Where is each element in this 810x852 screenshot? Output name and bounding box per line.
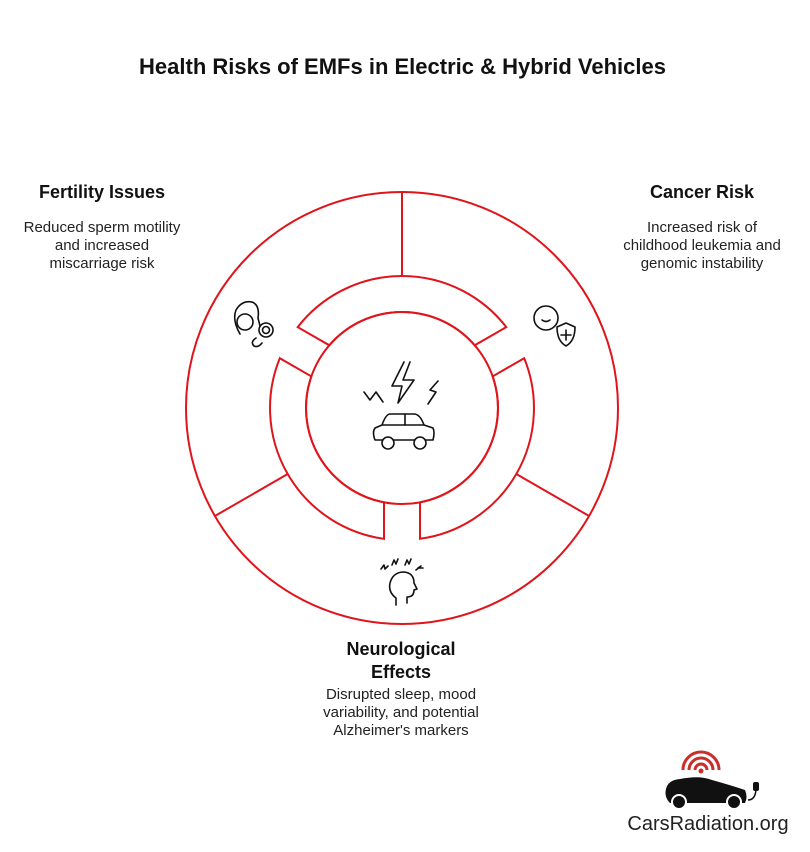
- heading: cancer: Cancer Risk: [650, 182, 754, 202]
- ring segment top: [298, 276, 506, 345]
- logo text: CarsRadiation.org: [627, 813, 789, 835]
- ring segment left: [270, 358, 384, 539]
- title: Health Risks of EMFs in Electric & Hybrid Vehicles: [139, 54, 666, 79]
- text: cancer: Increased risk of: [647, 219, 757, 236]
- icon: head with stress: [381, 559, 423, 605]
- icon: woman with baby: [235, 302, 273, 347]
- heading: fertility: Fertility Issues: [39, 182, 165, 202]
- ring segment right: [420, 358, 534, 539]
- icon: baby with shield: [534, 306, 575, 346]
- heading: neurological: Effects: [371, 662, 431, 682]
- text: neurological: Alzheimer's markers: [333, 722, 469, 739]
- text: fertility: [24, 219, 180, 272]
- center circle: [306, 312, 498, 504]
- text: cancer: childhood leukemia and: [623, 237, 781, 254]
- outer ring: [186, 192, 618, 624]
- text: neurological: Disrupted sleep, mood: [326, 686, 476, 703]
- text: neurological: [323, 686, 479, 739]
- text: cancer: genomic instability: [641, 255, 763, 272]
- text: fertility: and increased: [55, 237, 149, 254]
- logo: [666, 752, 759, 809]
- icon: bolt and car: [364, 362, 438, 449]
- text: neurological: variability, and potential: [323, 704, 479, 721]
- text: fertility: Reduced sperm motility: [24, 219, 180, 236]
- heading: neurological: [346, 639, 456, 682]
- heading: neurological: Neurological: [346, 639, 456, 659]
- text: fertility: miscarriage risk: [49, 255, 154, 272]
- text: cancer: [623, 219, 781, 272]
